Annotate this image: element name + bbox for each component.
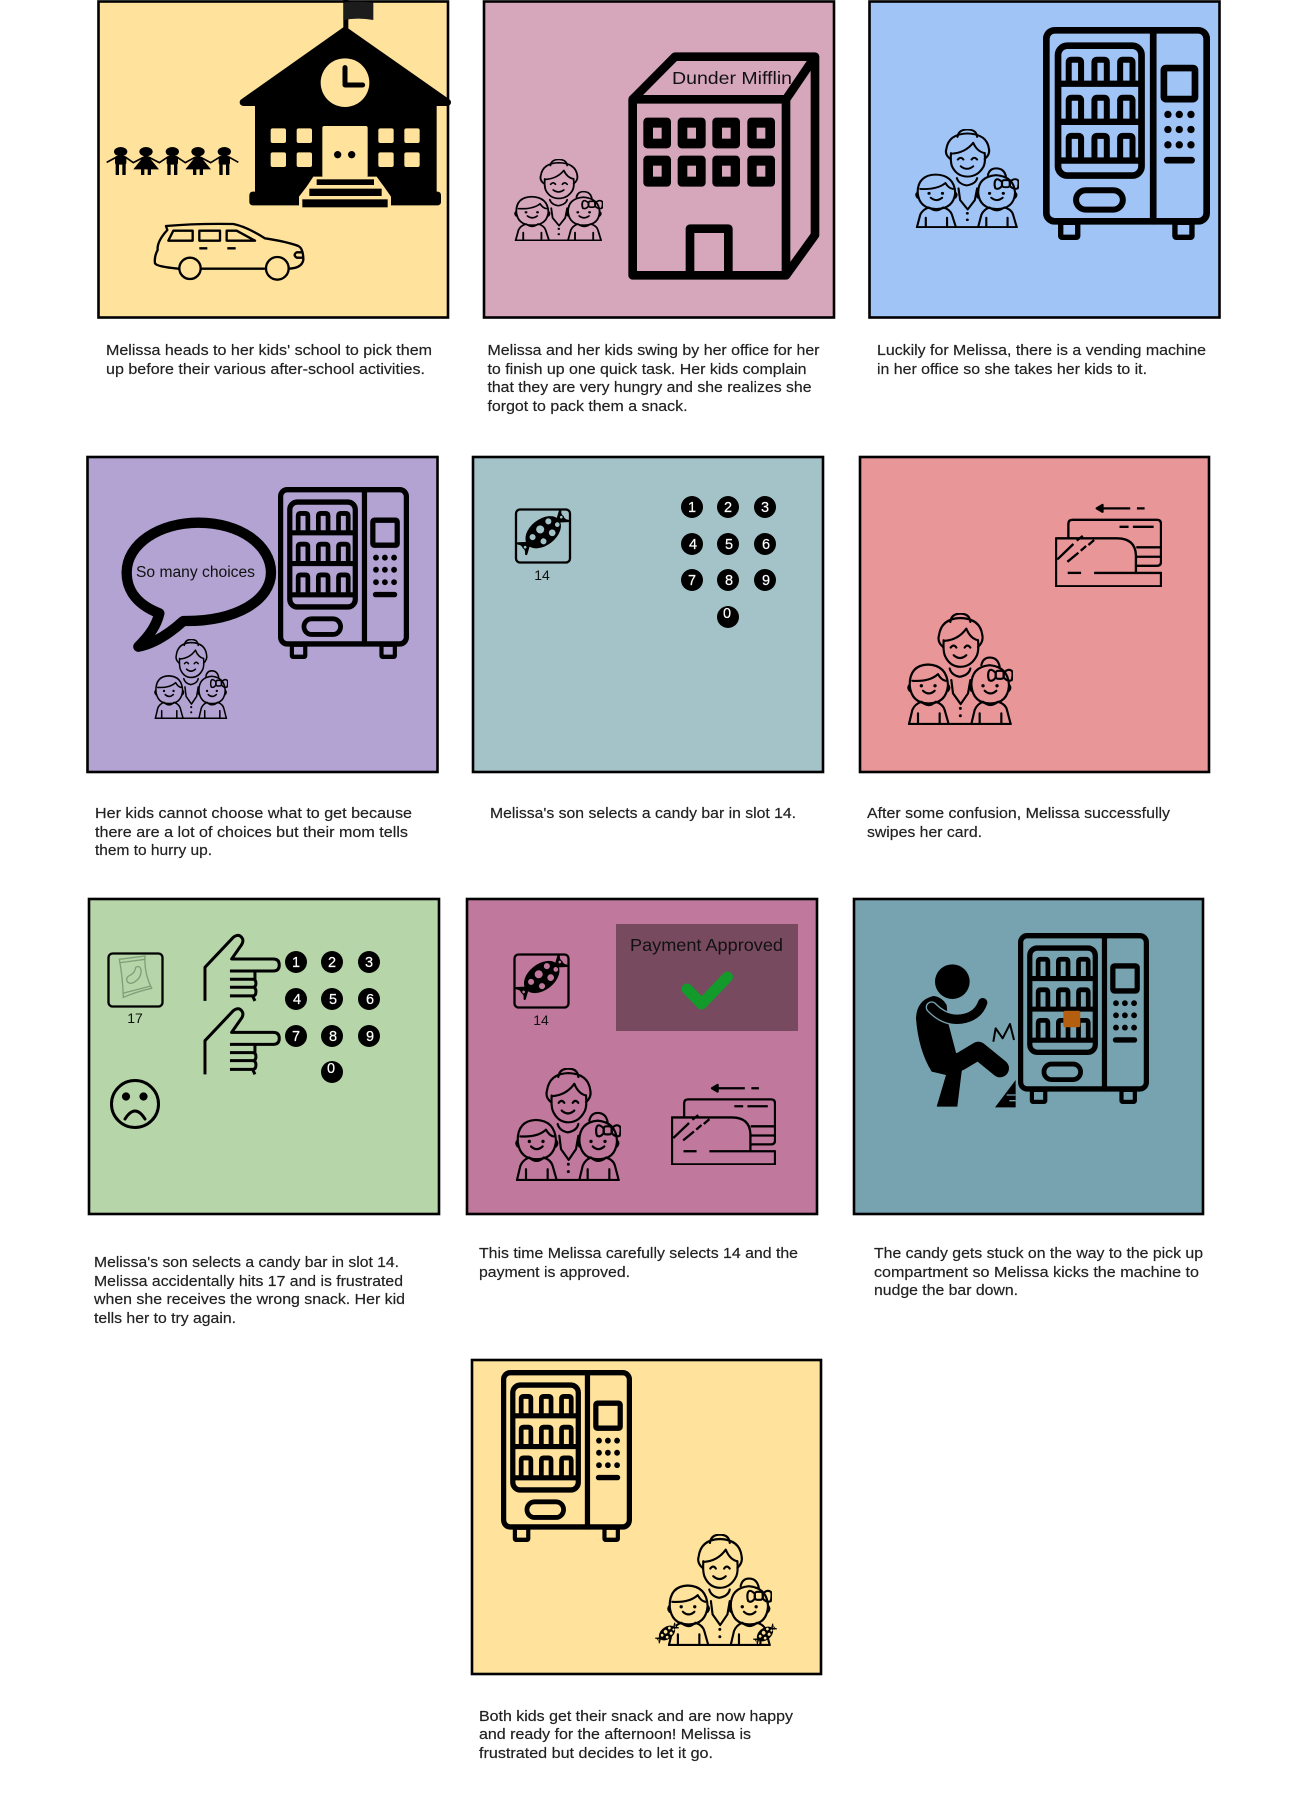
- keypad: [285, 951, 380, 1083]
- caption 10: frustrated but decides to let it go.: [479, 1746, 713, 1762]
- icon: Dunder Mifflin building: [633, 57, 815, 275]
- stuck candy: [1063, 1011, 1080, 1027]
- keypad: 7: [292, 1029, 300, 1045]
- caption 1: [106, 343, 432, 378]
- icon: family: [155, 639, 228, 718]
- keypad: 4: [293, 992, 301, 1008]
- icon: candy in slot 14: [514, 505, 572, 583]
- icon: speech bubble: So many choices: [136, 564, 255, 581]
- icon: vending machine: [1021, 936, 1146, 1102]
- icon: school building: [243, 0, 447, 208]
- icon: family: [908, 614, 1013, 724]
- caption 2: that they are very hungry and she realizes she: [488, 380, 812, 396]
- caption 1: up before their various after-school activities.: [106, 362, 425, 378]
- keypad: 0: [327, 1061, 335, 1077]
- icon: card reader: [1056, 505, 1161, 586]
- icon: vending machine: [281, 490, 406, 657]
- keypad: 6: [366, 992, 374, 1008]
- keypad: 3: [365, 955, 373, 971]
- panel 4: so many choices: [88, 457, 438, 772]
- icon: speech bubble: [127, 523, 271, 647]
- icon: card reader: [672, 1085, 775, 1164]
- caption 3: Luckily for Melissa, there is a vending machine: [877, 343, 1206, 359]
- caption 2: [488, 343, 820, 415]
- icon: green check: [687, 977, 728, 1004]
- caption 6: swipes her card.: [867, 825, 982, 841]
- icon: vending machine: [1046, 30, 1207, 237]
- panel 8: payment approved: [467, 899, 817, 1214]
- icon: person kicking: [916, 964, 1016, 1107]
- icon: chip bag in slot 17: [108, 954, 162, 1026]
- caption 8: [479, 1246, 798, 1281]
- caption 2: to finish up one quick task. Her kids complain: [488, 362, 806, 378]
- caption 9: nudge the bar down.: [874, 1283, 1018, 1299]
- icon: family: [516, 1069, 621, 1180]
- caption 7: when she receives the wrong snack. Her kid: [93, 1292, 405, 1308]
- icon: family: [515, 159, 603, 240]
- keypad: 8: [329, 1029, 337, 1045]
- keypad: 9: [366, 1029, 374, 1045]
- panel 5: son selects candy: [473, 457, 823, 772]
- keypad: 5: [725, 537, 733, 553]
- icon: vending machine: [504, 1373, 629, 1540]
- caption 10: Both kids get their snack and are now happy: [479, 1709, 794, 1725]
- caption 2: forgot to pack them a snack.: [488, 399, 688, 415]
- callout: payment approved: [616, 924, 798, 1031]
- caption 6: After some confusion, Melissa successfully: [867, 806, 1171, 822]
- icon: family with candy: [654, 1535, 778, 1646]
- caption 7: Melissa accidentally hits 17 and is frustrated: [94, 1274, 403, 1290]
- caption 4: Her kids cannot choose what to get because: [95, 806, 412, 822]
- keypad: 5: [329, 992, 337, 1008]
- panel 6: swipes card: [860, 457, 1209, 772]
- caption 9: The candy gets stuck on the way to the pick up: [874, 1246, 1203, 1262]
- icon: Dunder Mifflin building: Dunder Mifflin: [672, 68, 792, 88]
- caption 8: payment is approved.: [479, 1265, 630, 1281]
- caption 3: [877, 343, 1206, 378]
- panel 7: wrong snack: [89, 899, 439, 1214]
- caption 6: [867, 806, 1171, 841]
- keypad: 1: [688, 500, 696, 516]
- caption 4: there are a lot of choices but their mom tells: [95, 825, 408, 841]
- keypad: 8: [725, 573, 733, 589]
- caption 7: tells her to try again.: [94, 1311, 236, 1327]
- keypad: 3: [761, 500, 769, 516]
- caption 8: This time Melissa carefully selects 14 and the: [479, 1246, 798, 1262]
- caption 10: and ready for the afternoon! Melissa is: [479, 1727, 751, 1743]
- icon: candy in slot 14: 14: [534, 567, 550, 583]
- icon: chip bag in slot 17: 17: [127, 1010, 143, 1026]
- icon: family: [916, 130, 1019, 227]
- panel 2: office: [484, 2, 834, 318]
- caption 9: [874, 1246, 1203, 1299]
- caption 1: Melissa heads to her kids' school to pick them: [106, 343, 432, 359]
- keypad: 6: [762, 537, 770, 553]
- panel 1: school pickup: [98, 0, 448, 318]
- caption 10: [479, 1709, 794, 1762]
- caption 4: [95, 806, 412, 859]
- caption 5: Melissa's son selects a candy bar in slot 14.: [490, 806, 796, 822]
- caption 9: compartment so Melissa kicks the machine to: [874, 1265, 1199, 1281]
- caption 7: Melissa's son selects a candy bar in slot 14.: [94, 1255, 399, 1271]
- keypad: 2: [328, 955, 336, 971]
- callout: payment approved: Payment Approved: [630, 935, 783, 955]
- icon: candy in slot 14: 14: [533, 1012, 549, 1028]
- icon: car: [155, 224, 303, 280]
- icon: sad face: [112, 1080, 158, 1128]
- keypad: 0: [723, 606, 731, 622]
- icon: row of schoolchildren: [107, 147, 238, 175]
- icon: pointing hands: [205, 935, 279, 1074]
- panel 3: vending machine in office: [870, 2, 1220, 318]
- caption 2: Melissa and her kids swing by her office for her: [488, 343, 820, 359]
- caption 7: [93, 1255, 405, 1327]
- icon: candy in slot 14: [513, 950, 571, 1028]
- keypad: [681, 496, 776, 628]
- keypad: 4: [689, 537, 697, 553]
- caption 4: them to hurry up.: [95, 843, 212, 859]
- panel 9: kicking machine: [854, 899, 1203, 1214]
- keypad: 2: [724, 500, 732, 516]
- keypad: 9: [762, 573, 770, 589]
- panel 10: happy ending: [472, 1360, 821, 1674]
- caption 3: in her office so she takes her kids to it.: [877, 362, 1147, 378]
- keypad: 1: [292, 955, 300, 971]
- keypad: 7: [688, 573, 696, 589]
